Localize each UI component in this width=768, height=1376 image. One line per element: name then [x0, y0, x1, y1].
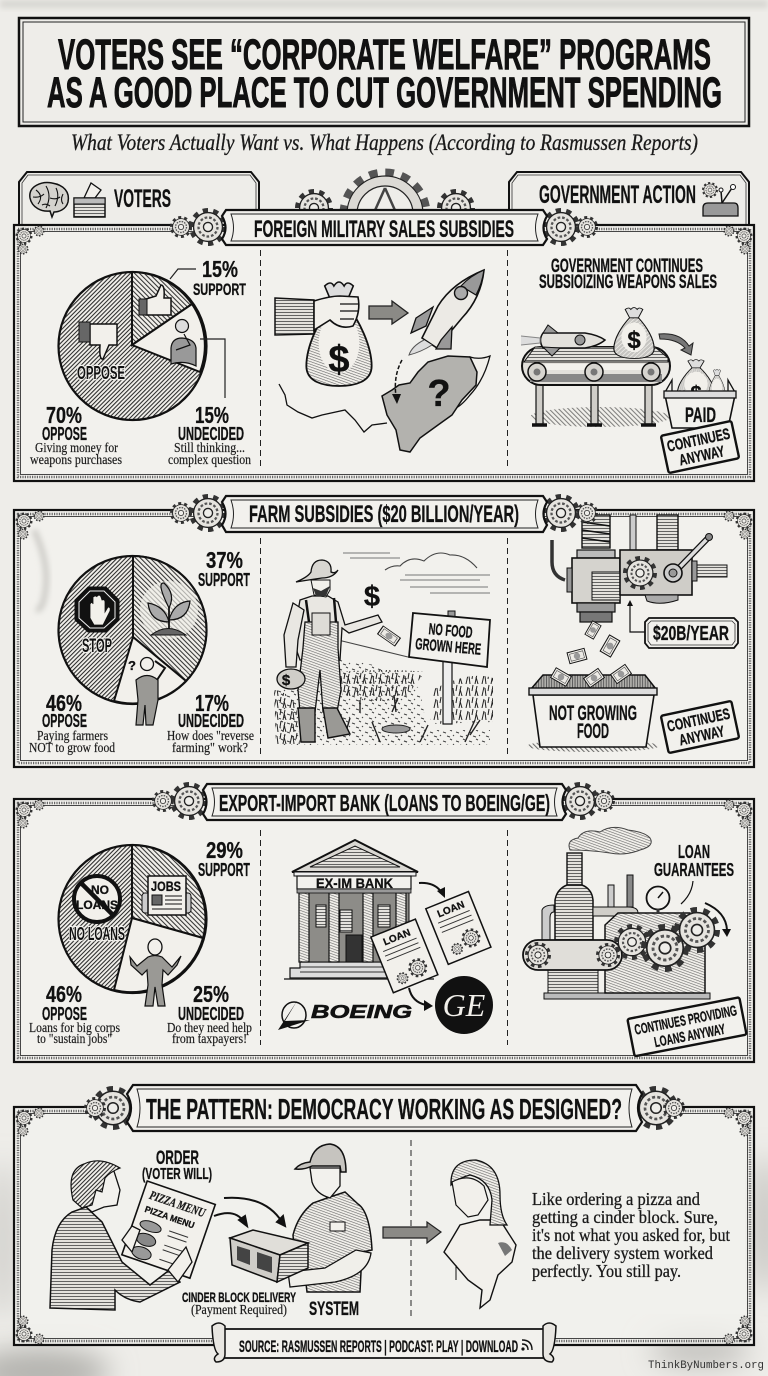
illustration: rocket	[409, 270, 484, 355]
illustration: farmer: $	[282, 672, 291, 689]
stat: 15% support: 15%	[202, 256, 238, 282]
label: loan guarantees: LOAN	[678, 842, 710, 862]
stat: 46% oppose: Paying farmers	[37, 728, 108, 743]
stat: 70% oppose: 70%	[46, 402, 82, 428]
text block: pizza analogy: getting a cinder block. Sure,	[532, 1207, 718, 1227]
icon: no loans sign: LOANS	[76, 898, 118, 912]
pie chart: foreign military sales	[58, 269, 225, 420]
label: oppose in pie: OPPOSE	[77, 363, 125, 383]
stamp: continues anyway: ANYWAY	[678, 723, 727, 749]
leader lines	[170, 269, 225, 398]
stat: 17% undecided: 17%	[195, 690, 229, 716]
icon: loan document back	[426, 891, 491, 964]
icon: shrugging person	[130, 939, 181, 1006]
heading: government continues	[539, 256, 717, 293]
illustration: paid bin	[664, 359, 736, 428]
text block: pizza analogy: Like ordering a pizza and	[532, 1189, 700, 1209]
logo: GE	[435, 976, 493, 1034]
stamp: continues providing loans anyway	[627, 997, 747, 1056]
stat: 29% support: 29%	[206, 837, 243, 863]
callout: $20B/year	[627, 600, 738, 648]
illustration: farmer	[277, 560, 382, 742]
stamp: continues providing loans anyway: LOANS ANYWAY	[653, 1022, 727, 1051]
stat: 37% support: SUPPORT	[198, 570, 250, 590]
icon: rss	[521, 1340, 532, 1351]
stat: 70% oppose: OPPOSE	[42, 424, 87, 444]
stat: 15% undecided: UNDECIDED	[178, 424, 244, 444]
stat: 25% undecided: from taxpayers!	[172, 1031, 247, 1046]
icon: thumbs down	[79, 322, 117, 359]
illustration: man reading menu	[50, 1161, 180, 1310]
icon: pizza menu	[122, 1181, 215, 1278]
stat: 25% undecided: Do they need help	[167, 1020, 252, 1035]
icon: jobs newspaper	[142, 876, 191, 915]
arrow: loan to GE	[409, 988, 426, 1005]
column tab: government action	[509, 172, 749, 226]
heading: order (voter will)	[142, 1148, 212, 1183]
stat: 15% support	[193, 256, 246, 299]
text block: pizza analogy: perfectly. You still pay.	[532, 1261, 681, 1281]
text block: pizza analogy: it's not what you asked for, but	[532, 1225, 730, 1245]
icon: no loans sign	[74, 876, 120, 922]
illustration: delivery person	[288, 1144, 372, 1292]
illustration: map with question mark	[279, 356, 490, 452]
arrows: order to delivery	[214, 1198, 285, 1226]
text block: pizza analogy: the delivery system worked	[532, 1243, 713, 1263]
stat: 70% oppose	[30, 402, 122, 467]
stat: 17% undecided: How does "reverse	[167, 728, 254, 743]
stamp: continues anyway: CONTINUES	[666, 706, 732, 736]
icon: jobs newspaper: JOBS	[151, 878, 181, 894]
icon: control machine	[703, 183, 738, 216]
panel: farm subsidies	[14, 496, 764, 1372]
sign: no food grown here: GROWN HERE	[415, 636, 482, 659]
stat: 46% oppose	[29, 690, 115, 755]
arrow: money to rocket	[369, 301, 408, 324]
icon: loan document back: LOAN	[436, 899, 466, 920]
stat: 70% oppose: Giving money for	[35, 440, 118, 455]
stat: 46% oppose: OPPOSE	[42, 1004, 87, 1024]
illustration: hand holding money bag	[275, 282, 372, 386]
icon: money bag on belt	[614, 307, 654, 358]
illustration: press machine	[552, 515, 727, 622]
stat: 29% support: SUPPORT	[198, 860, 250, 880]
icon: thinking person	[171, 320, 196, 366]
icon: brain	[30, 183, 68, 217]
logo: boeing: BOEING	[311, 1002, 412, 1022]
illustration: paid bin: PAID	[685, 404, 716, 427]
banner: export-import bank	[153, 784, 614, 820]
icon: confused person	[128, 658, 165, 725]
icon: pizza menu: PIZZA MENU	[143, 1204, 196, 1230]
stat: 37% support	[198, 547, 250, 590]
stat: 29% support	[198, 837, 250, 880]
icon: pizza menu: PIZZA MENU	[148, 1188, 208, 1220]
stat: 15% support: SUPPORT	[193, 280, 246, 299]
banner: farm subsidies: FARM SUBSIDIES ($20 BILLION/YEAR)	[249, 501, 519, 528]
stat: 17% undecided: UNDECIDED	[178, 711, 244, 731]
stain	[34, 530, 46, 610]
stat: 25% undecided: 25%	[193, 981, 229, 1007]
icon: hands on menu	[122, 1226, 192, 1282]
stamp: continues anyway: CONTINUES	[666, 426, 732, 456]
label: system: SYSTEM	[309, 1299, 359, 1320]
illustration: not growing food bin: FOOD	[577, 720, 609, 743]
banner: foreign military sales subsidies: FOREIGN MILITARY SALES SUBSIDIES	[254, 216, 514, 243]
heading: order (voter will): (VOTER WILL)	[142, 1166, 212, 1183]
label: cinder block delivery: (Payment Required)	[191, 1302, 287, 1317]
stat: 46% oppose: OPPOSE	[42, 711, 87, 731]
stat: 25% undecided	[167, 981, 252, 1046]
illustration: map with question mark: ?	[427, 373, 451, 415]
watermark: ThinkByNumbers.org	[648, 1360, 764, 1372]
panel: foreign military sales subsidies	[14, 210, 754, 481]
stat: 46% oppose	[29, 981, 120, 1046]
stat: 37% support: 37%	[206, 547, 243, 573]
illustration: ex-im bank building	[284, 840, 434, 979]
icon: money bag on belt: $	[627, 327, 641, 354]
stat: 15% undecided: Still thinking...	[174, 440, 245, 455]
label: voters: VOTERS	[114, 185, 171, 213]
illustration: hand holding money bag: $	[328, 339, 350, 381]
icon: confused person: ?	[128, 658, 136, 673]
label: stop: STOP	[82, 636, 112, 657]
heading: order (voter will): ORDER	[156, 1148, 199, 1169]
banner: export-import bank: EXPORT-IMPORT BANK (LOANS TO BOEING/GE)	[219, 790, 550, 816]
stat: 46% oppose: 46%	[46, 690, 82, 716]
decorative central gears	[297, 173, 473, 255]
icon: loan document front	[371, 919, 438, 993]
logo: boeing	[278, 1001, 412, 1030]
callout: $20B/year: $20B/YEAR	[653, 623, 729, 645]
illustration: not growing food bin: NOT GROWING	[549, 702, 637, 725]
stat: 17% undecided: farming" work?	[172, 740, 248, 755]
icon: ballot box	[74, 183, 105, 217]
text block: pizza analogy	[532, 1189, 730, 1281]
label: cinder block delivery	[182, 1289, 296, 1317]
stat: 17% undecided	[167, 690, 254, 755]
panel: the pattern	[14, 1085, 754, 1345]
illustration: field and clouds	[274, 553, 493, 745]
stat: 15% undecided	[168, 402, 251, 467]
panel: export-import bank	[14, 784, 754, 1062]
stat: 70% oppose: weapons purchases	[30, 452, 122, 467]
stat: 46% oppose: to "sustain jobs"	[37, 1031, 112, 1046]
icon: dollar sign and bill: $	[364, 581, 380, 613]
arrow: bank to loan	[419, 883, 442, 893]
arrow: belt to bin	[659, 334, 693, 355]
pie chart: farm subsidies	[58, 556, 206, 725]
icon: loan document front: LOAN	[382, 927, 412, 948]
icon: stop sign	[75, 587, 119, 632]
icon: thumbs up	[139, 285, 171, 315]
icon: cinder block	[230, 1230, 308, 1282]
icon: rocket on belt	[521, 325, 605, 356]
sign: no food grown here: NO FOOD	[428, 621, 473, 642]
illustration: loan machine	[523, 827, 731, 999]
stamp: continues anyway	[661, 701, 739, 753]
pie chart: export-import bank	[58, 845, 206, 1006]
icon: no loans sign: NO	[91, 883, 109, 897]
icon: falling bills	[567, 621, 620, 664]
arrow: system to customer	[383, 1222, 441, 1243]
stat: 46% oppose: 46%	[46, 981, 82, 1007]
source scroll: SOURCE: RASMUSSEN REPORTS | PODCAST: PLAY | DOWNLOAD	[239, 1338, 518, 1356]
illustration: ex-im bank building: EX-IM BANK	[316, 875, 393, 891]
banner: foreign military sales subsidies	[171, 210, 597, 245]
stamp: continues anyway: ANYWAY	[678, 443, 727, 469]
label: cinder block delivery: CINDER BLOCK DELIVERY	[182, 1289, 296, 1305]
label: no loans: NO LOANS	[69, 924, 125, 944]
sign: no food grown here	[409, 611, 490, 724]
stat: 15% undecided: complex question	[168, 452, 251, 467]
banner: farm subsidies	[171, 496, 597, 532]
source scroll	[212, 1323, 556, 1362]
stat: 25% undecided: UNDECIDED	[178, 1004, 244, 1024]
stat: 46% oppose: Loans for big corps	[29, 1020, 120, 1035]
illustration: conveyor belt	[522, 347, 670, 427]
banner: the pattern	[85, 1085, 684, 1131]
icon: dollar sign and bill	[364, 581, 400, 646]
column tab: voters	[19, 172, 259, 226]
illustration: not growing food bin	[527, 664, 659, 752]
stat: 46% oppose: NOT to grow food	[29, 740, 115, 755]
illustration: woman in hoodie	[444, 1160, 516, 1308]
logo: GE: GE	[443, 987, 486, 1023]
label: loan guarantees	[654, 842, 734, 904]
illustration: paid bin: $	[690, 383, 702, 405]
title	[19, 18, 749, 126]
stamp: continues anyway	[661, 421, 739, 473]
stat: 15% undecided: 15%	[195, 402, 229, 428]
icon: seedling	[140, 581, 198, 639]
